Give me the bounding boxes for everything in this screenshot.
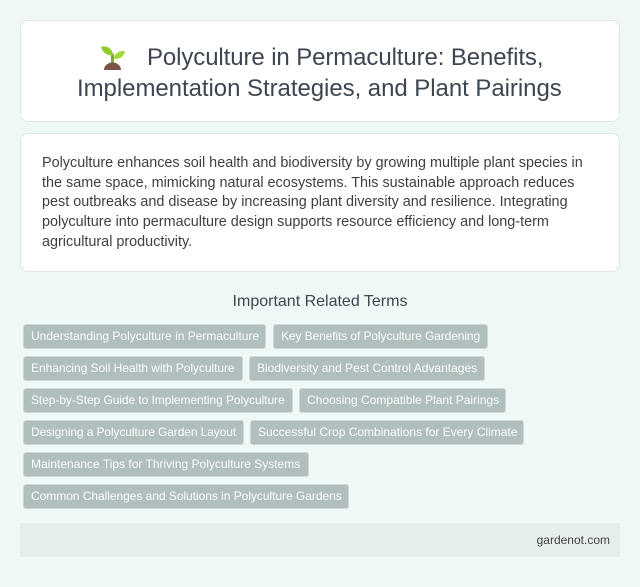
icon: seedling: [101, 46, 125, 70]
related terms tags: [23, 324, 524, 509]
intro text: Polyculture enhances soil health and biodiversity by growing multiple plant species in: [42, 155, 583, 171]
footer source: gardenot.com: [537, 533, 610, 547]
intro text: agricultural productivity.: [42, 234, 192, 250]
footer bar: [20, 523, 620, 557]
header card: [20, 20, 620, 122]
related terms tags: Understanding Polyculture in Permaculture: [31, 329, 259, 343]
intro text card: [20, 133, 620, 272]
intro text: [42, 155, 583, 250]
related terms tags: Designing a Polyculture Garden Layout: [31, 425, 236, 439]
related terms tags: Biodiversity and Pest Control Advantages: [257, 361, 477, 375]
related terms tags: Successful Crop Combinations for Every Climate: [258, 425, 517, 439]
related terms tags: Choosing Compatible Plant Pairings: [307, 393, 499, 407]
intro text: the same space, mimicking natural ecosystems. This sustainable approach reduces: [42, 175, 574, 191]
title: Polyculture in Permaculture: Benefits,: [147, 44, 543, 71]
related terms tags: Key Benefits of Polyculture Gardening: [281, 329, 480, 343]
title: [77, 44, 562, 102]
intro text: polyculture into permaculture design supports resource efficiency and long-term: [42, 214, 549, 230]
related terms tags: Maintenance Tips for Thriving Polyculture Systems: [31, 457, 300, 471]
title: Implementation Strategies, and Plant Pairings: [77, 75, 562, 102]
related terms tags: Step-by-Step Guide to Implementing Polyculture: [31, 393, 285, 407]
related terms tags: Enhancing Soil Health with Polyculture: [31, 361, 235, 375]
related terms tags: Common Challenges and Solutions in Polyculture Gardens: [31, 489, 342, 503]
intro text: pest outbreaks and disease by increasing plant diversity and resilience. Integrating: [42, 194, 568, 210]
section heading: Important Related Terms: [233, 293, 407, 310]
